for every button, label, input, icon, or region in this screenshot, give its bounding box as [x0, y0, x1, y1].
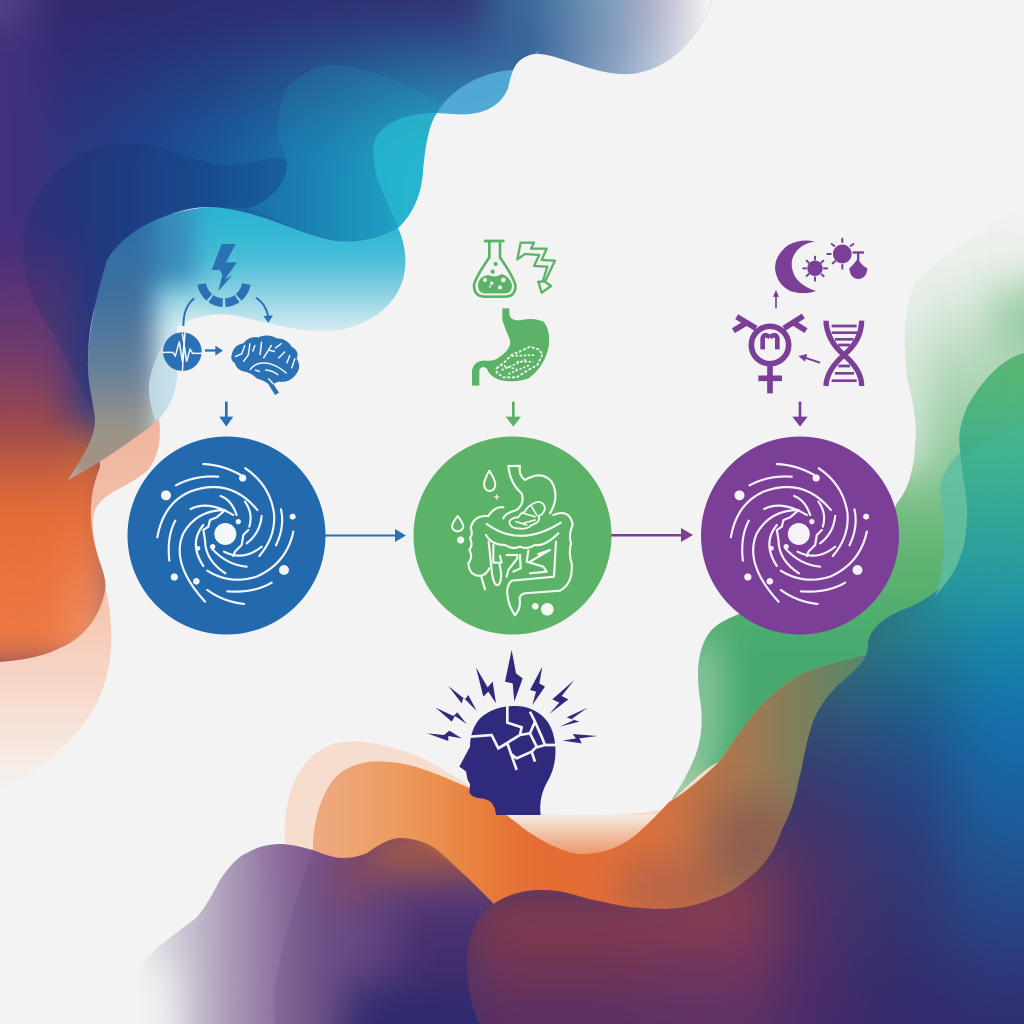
panel: hormonal step icons: [733, 239, 867, 427]
arrow: down to blue circle: [219, 402, 233, 427]
arrow: signal to brain: [205, 346, 223, 356]
panel: green digestion circle: [414, 436, 612, 634]
panel: top-left blue to orange wave: [0, 0, 712, 662]
panel: bottom orange wave: [284, 655, 866, 909]
bright teal lobe: [373, 113, 437, 228]
icon: lightning bolt: [212, 244, 237, 291]
icon: galaxy spiral: [157, 464, 296, 604]
light blue lobe: [437, 50, 540, 114]
icon: gender symbol with horns: [733, 316, 806, 393]
dark swirl lobe: [23, 143, 287, 407]
panel: bottom purple wave: [144, 838, 494, 1024]
icon: balance scale: [849, 251, 867, 279]
arrow: arc into brain: [256, 298, 273, 323]
icon: migraine head with lightning: [427, 650, 597, 815]
icon: DNA helix: [826, 321, 862, 386]
connector: blue circle to green circle arrow: [325, 529, 406, 542]
pale crescent: [149, 328, 177, 424]
lightning bolts: [427, 650, 597, 743]
panel: purple galaxy circle: [701, 436, 899, 634]
icon: signal circle: [163, 332, 202, 372]
head silhouette: [459, 706, 555, 815]
connector: moon to gender symbol: [774, 292, 778, 308]
head cracks: [470, 706, 556, 770]
icon: galaxy spiral: [731, 464, 869, 604]
icon: large sun: [827, 239, 853, 269]
panel: digestive step icons: [472, 241, 555, 427]
icon: flask: [474, 241, 515, 297]
icon: digestive tract: [452, 466, 573, 616]
icon: crescent moon: [775, 241, 816, 293]
arrow: down to purple circle: [792, 402, 808, 427]
icon: small sun: [803, 257, 827, 281]
panel: blue galaxy circle: [128, 436, 326, 634]
icon: brain: [231, 336, 299, 395]
icon: stomach: [472, 308, 549, 386]
light teal sliver: [935, 450, 967, 597]
arrow: down to green circle: [506, 402, 521, 427]
panel: neural step icons: [163, 244, 299, 427]
icon: arc segments: [202, 284, 246, 303]
translucent lower lobe: [68, 207, 406, 480]
top-right fade: [540, 0, 712, 74]
panel: bottom-right blue to purple mass: [467, 353, 1024, 1024]
panel: right green wave: [672, 242, 1024, 800]
connector: green circle to purple circle arrow: [611, 528, 693, 542]
upper teal lobe: [248, 65, 432, 228]
arrow: arc into wave symbol: [183, 298, 194, 326]
panel: left pale orange wash: [0, 419, 160, 772]
teal diagonal lobe: [1016, 424, 1024, 430]
arrow: DNA to gender symbol: [798, 354, 820, 363]
icon: outlined lightning: [517, 243, 555, 293]
